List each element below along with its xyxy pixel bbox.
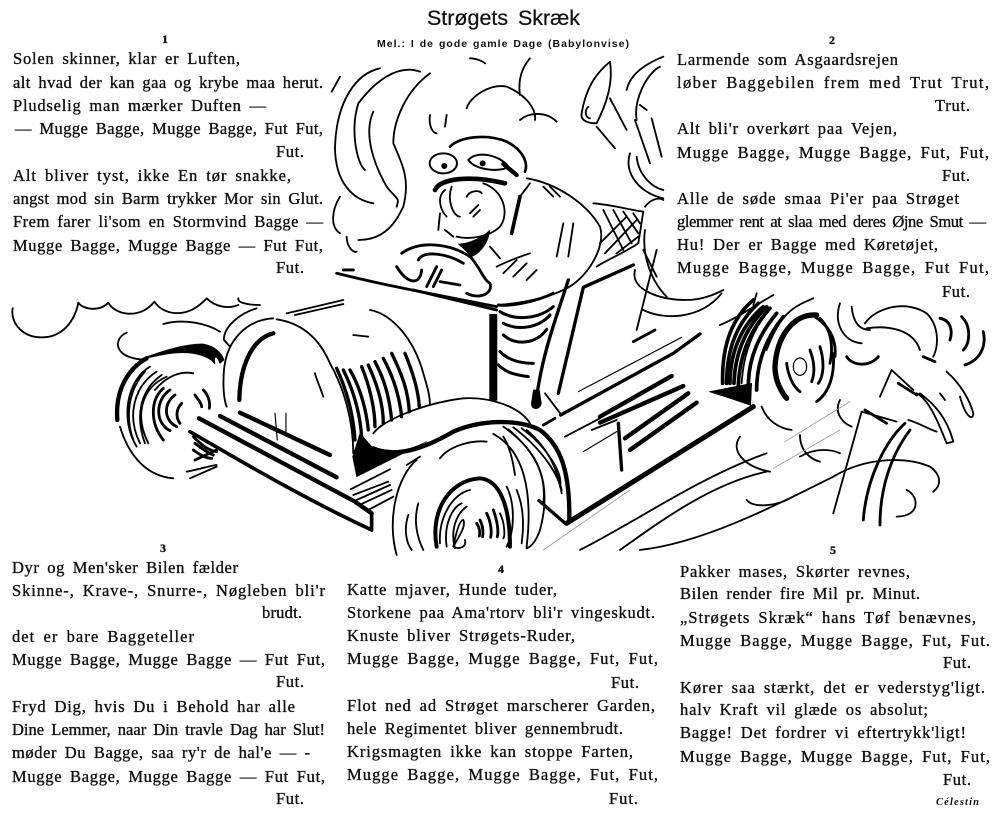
stanza 1: Mugge Bagge, Mugge Bagge — Fut Fut, <box>13 236 323 255</box>
stanza 2 <box>677 33 989 301</box>
hood arches <box>223 310 430 453</box>
chassis corner <box>539 501 566 524</box>
stanza 5 <box>680 543 990 789</box>
helmet and goggles <box>450 137 526 172</box>
central wheel tyre lines <box>393 441 487 555</box>
stanza 3: Skinne-, Krave-, Snurre-, Nøgleben bli'r <box>12 581 326 600</box>
upper right swooshes <box>634 250 723 330</box>
net seat back <box>593 203 643 267</box>
beard <box>458 230 490 257</box>
stanza 1: alt hvad der kan gaa og krybe maa herut. <box>13 73 323 92</box>
stanza 2: Larmende som Asgaardsrejen <box>677 50 898 69</box>
central wheel, fender and seat <box>353 290 569 555</box>
stanza 2: Hu! Der er Bagge med Køretøjet, <box>677 235 938 254</box>
stanza 1: Alt bliver tyst, ikke En tør snakke, <box>13 166 291 185</box>
stanza 5: Bilen render fire Mil pr. Minut. <box>680 584 920 603</box>
stanza 5: Fut. <box>943 770 971 789</box>
rear wheel <box>709 383 752 405</box>
stanza 5: Fut. <box>943 653 971 672</box>
seat ribs <box>498 293 553 377</box>
stanza 1: Fut. <box>276 258 304 277</box>
subtitle: melody: Mel.: I de gode gamle Dage (Babylonvise) <box>377 38 629 50</box>
driver and smoke <box>332 57 667 307</box>
stanza 4 <box>347 562 658 808</box>
stanza 4: Fut. <box>611 673 639 692</box>
body side panel lines <box>561 334 700 415</box>
author signature: Célestin <box>936 797 979 808</box>
stanza 3: Fryd Dig, hvis Du i Behold har alle <box>12 697 295 716</box>
front fender blob <box>140 344 224 364</box>
stanza 1: — Mugge Bagge, Mugge Bagge, Fut Fut, <box>14 119 323 138</box>
stanza 3: Dyr og Men'sker Bilen fælder <box>12 558 238 577</box>
stanza 2: 2 <box>829 33 835 47</box>
illustration: runaway car with driver <box>12 57 984 555</box>
stanza 1: Solen skinner, klar er Luften, <box>13 49 240 68</box>
running bars <box>199 413 372 513</box>
stanza 5: Mugge Bagge, Mugge Bagge, Fut, Fut. <box>680 631 990 650</box>
stanza 1: Fut. <box>276 142 304 161</box>
dashboard <box>337 270 497 307</box>
fender <box>373 398 530 433</box>
stanza 5: Bagge! Det fordrer vi eftertrykk'ligt! <box>680 723 966 742</box>
stanza 2: Mugge Bagge, Mugge Bagge, Fut, Fut, <box>677 143 989 162</box>
stanza 4: Knuste bliver Strøgets-Ruder, <box>347 626 575 645</box>
door post <box>481 314 505 401</box>
stanza 2: Alt bli'r overkørt paa Vejen, <box>677 119 897 138</box>
stanza 1: Frem farer li'som en Stormvind Bagge — <box>13 212 324 231</box>
stanza 3 <box>12 541 326 808</box>
stanza 2: løber Baggebilen frem med Trut Trut, <box>677 73 989 92</box>
rear seat lines <box>644 199 667 297</box>
stanza 5: Pakker mases, Skørter revnes, <box>680 562 910 581</box>
stanza 2: Mugge Bagge, Mugge Bagge, Fut Fut, <box>677 258 989 277</box>
dashboard edge <box>413 290 497 310</box>
stanza 3: Mugge Bagge, Mugge Bagge — Fut Fut, <box>12 767 325 786</box>
stanza 4: Krigsmagten ikke kan stoppe Farten, <box>347 742 633 761</box>
stanza 3: Mugge Bagge, Mugge Bagge — Fut Fut, <box>12 650 325 669</box>
rear body, rear wheel and fleeing figure <box>531 250 984 550</box>
stanza 4: Fut. <box>609 789 638 808</box>
stanza 2: Fut. <box>942 166 970 185</box>
stanza 3: møder Du Bagge, saa ry'r de hal'e — - <box>12 743 310 762</box>
stanza 2: Alle de søde smaa Pi'er paa Strøget <box>677 189 959 208</box>
fleeing figure <box>833 303 973 513</box>
stanza 4: Flot ned ad Strøget marscherer Garden, <box>347 696 655 715</box>
stanza 1 <box>13 32 324 277</box>
stanza 4: Katte mjaver, Hunde tuder, <box>347 580 557 599</box>
stanza 3: Dine Lemmer, naar Din travle Dag har Slut! <box>12 720 325 739</box>
front wheel <box>117 358 147 420</box>
stanza 1: 1 <box>162 32 168 46</box>
stanza 3: 3 <box>160 541 166 555</box>
stanza 5: 5 <box>830 543 836 557</box>
shadow patch <box>353 433 427 477</box>
louvres <box>600 376 697 450</box>
raised hands <box>581 57 663 198</box>
stanza 1: angst mod sin Barm trykker Mor sin Glut. <box>13 189 323 208</box>
stanza 1: Pludselig man mærker Duften — <box>13 96 266 115</box>
stanza 5: Mugge Bagge, Mugge Bagge, Fut, Fut, <box>680 747 990 766</box>
stanza 4: 4 <box>498 562 504 576</box>
door posts <box>537 265 633 397</box>
stanza 5: halv Kraft vil glæde os absolut; <box>680 700 928 719</box>
stanza 3: brudt. <box>262 603 302 622</box>
stanza 2: Fut. <box>942 282 970 301</box>
smoke swirls <box>332 58 557 252</box>
stanza 4: hele Regimentet bliver gennembrudt. <box>347 719 623 738</box>
arm and steering hands <box>397 245 491 296</box>
stanza 3: Fut. <box>276 789 304 808</box>
face <box>438 183 505 238</box>
stanza 5: Kører saa stærkt, det er vederstyg'ligt. <box>680 678 985 697</box>
chassis sill <box>567 407 753 523</box>
stanza 4: Mugge Bagge, Mugge Bagge, Fut, Fut, <box>347 765 658 784</box>
stanza 2: Trut. <box>935 96 970 115</box>
stanza 4: Mugge Bagge, Mugge Bagge, Fut, Fut, <box>347 649 658 668</box>
stanza 3: Fut. <box>276 672 304 691</box>
title: Strøgets Skræk <box>427 6 580 30</box>
central wheel hub <box>435 478 510 547</box>
stanza 5: „Strøgets Skræk“ hans Tøf benævnes, <box>680 608 976 627</box>
radiator grille strokes <box>337 353 419 440</box>
body and coat <box>490 178 601 305</box>
road speed lines <box>580 400 939 550</box>
exhaust cloud outline <box>12 298 343 359</box>
stanza 3: det er bare Baggeteller <box>12 627 194 646</box>
stanza 2: glemmer rent at slaa med deres Øjne Smut — <box>677 212 986 231</box>
stanza 4: Storkene paa Ama'rtorv bli'r vingeskudt. <box>347 603 655 622</box>
exhaust clouds, front wheel and hood <box>12 298 430 530</box>
